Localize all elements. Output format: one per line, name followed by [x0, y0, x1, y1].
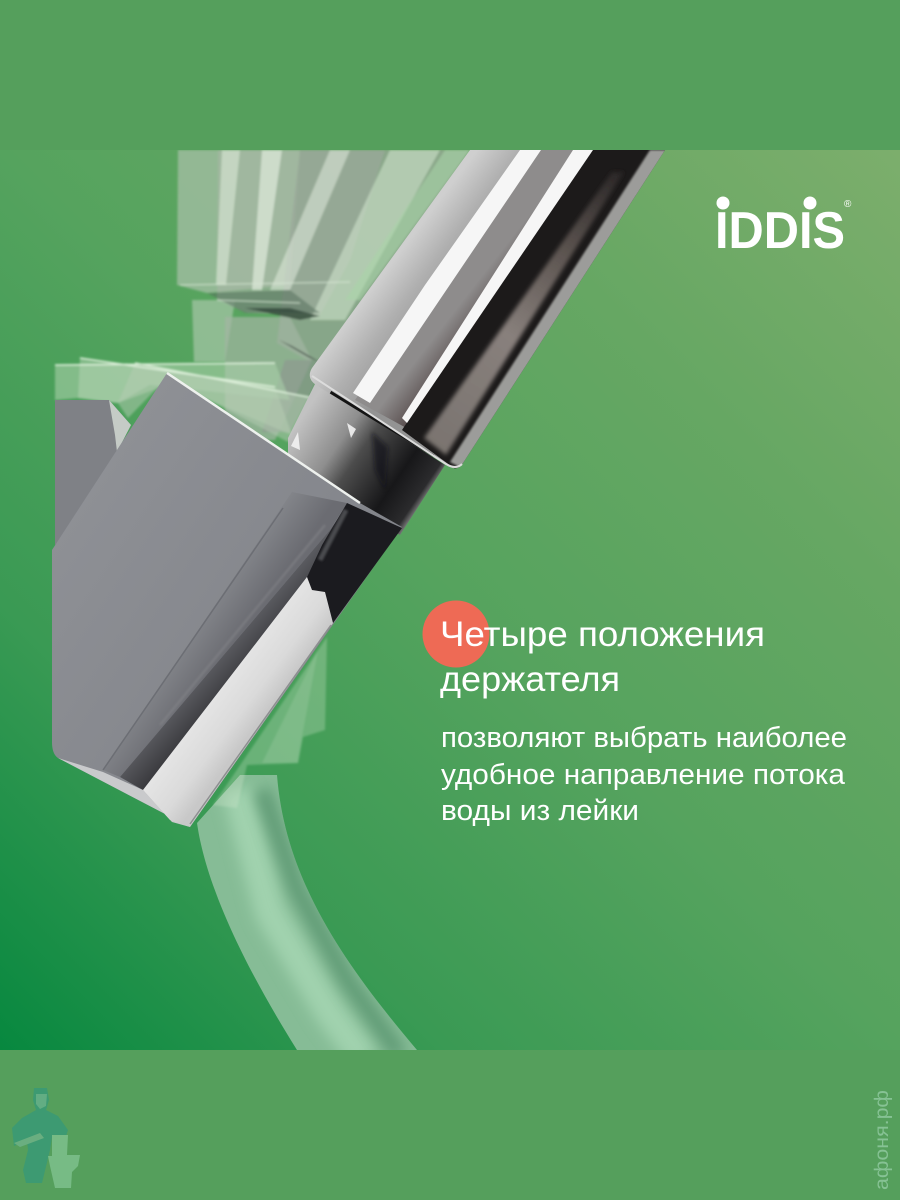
ghost positions of holder top — [55, 358, 313, 442]
heading — [440, 615, 765, 699]
grey outer edge — [450, 150, 670, 470]
watermark plumber icon — [12, 1088, 80, 1188]
middle band — [355, 150, 566, 427]
body text: позволяют выбрать наиболее — [441, 722, 847, 754]
background top band — [0, 0, 900, 150]
holder side band — [103, 492, 347, 777]
chrome streak 1 — [353, 150, 541, 403]
ghost reflections — [216, 150, 240, 285]
red accent circle — [422, 600, 490, 668]
shower head bottom lip — [312, 376, 462, 467]
flexible hose — [197, 775, 417, 1050]
ghost positions of hand shower — [177, 150, 470, 440]
holder top black reflection — [307, 503, 402, 623]
brand logo iddis: IDDIS — [715, 202, 845, 260]
watermark site name: афоня.рф — [872, 1090, 893, 1190]
wall bracket grey block — [55, 400, 131, 545]
holder top light edge — [167, 373, 360, 503]
chrome streak 2 — [402, 150, 593, 423]
dark right part — [402, 150, 670, 480]
body text: удобное направление потока — [441, 759, 846, 791]
holder white highlight — [143, 577, 333, 827]
background bottom band — [0, 1050, 900, 1200]
holder main face — [52, 373, 402, 827]
neck of holder — [288, 382, 445, 535]
holder dark reflection — [120, 505, 347, 790]
main shower head cone — [290, 150, 670, 480]
shower head rim — [330, 393, 433, 457]
body text: воды из лейки — [441, 795, 639, 827]
body text — [441, 722, 847, 827]
brown band — [424, 172, 624, 455]
heading: держателя — [440, 660, 620, 699]
heading: Четыре положения — [440, 615, 765, 654]
product illustration: shower holder with hand shower — [52, 150, 670, 1060]
central gradient panel — [0, 150, 900, 1050]
ghost positions of holder bottom — [213, 637, 327, 808]
brand logo iddis: ® — [844, 199, 852, 210]
holder right edge line — [190, 625, 331, 824]
holder lower rim strip — [58, 758, 190, 827]
